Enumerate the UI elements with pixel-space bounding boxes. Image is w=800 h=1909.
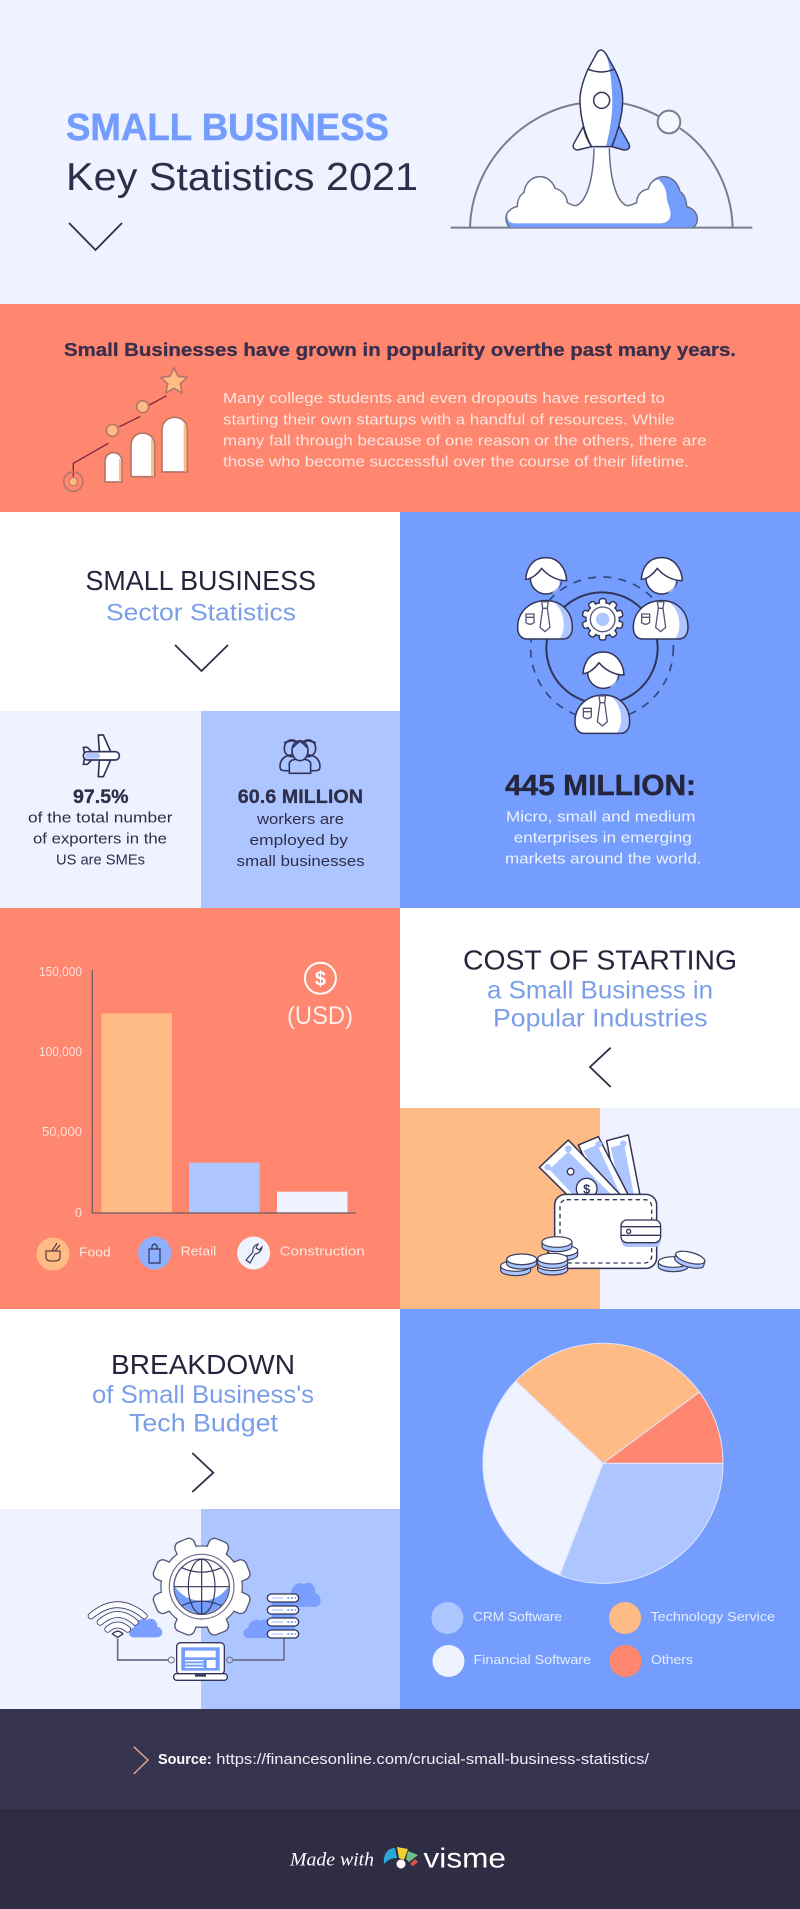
text block: workers description: small businesses bbox=[237, 854, 365, 870]
text block: enterprises description: markets around the world. bbox=[505, 852, 702, 868]
text block: intro paragraph: starting their own startups with a handful of resources. While bbox=[223, 412, 674, 428]
icon: rocket launch bbox=[451, 50, 752, 228]
text block: workers description: employed by bbox=[250, 833, 349, 849]
panel: tech budget pie bbox=[400, 1309, 800, 1709]
subheading: tech budget bbox=[92, 1381, 314, 1438]
text block: exporters description: US are SMEs bbox=[56, 853, 145, 869]
panel: emerging markets bbox=[400, 512, 800, 908]
subheading: tech budget: of Small Business's bbox=[92, 1381, 314, 1409]
text block: exporters description bbox=[28, 811, 173, 869]
panel: sector statistics heading bbox=[0, 512, 400, 711]
label: usd: (USD) bbox=[287, 1002, 353, 1030]
text: source citation: https://financesonline.com/crucial-small-business-statistics/ bbox=[216, 1752, 650, 1768]
legend: tech budget: CRM Software bbox=[473, 1609, 562, 1624]
text block: intro paragraph: Many college students and even dropouts have resorted to bbox=[223, 391, 665, 407]
panel: wallet illustration bbox=[400, 1108, 800, 1309]
arrow: chevron right bbox=[192, 1453, 213, 1492]
icon: wallet with cash and coins bbox=[501, 1135, 706, 1276]
legend: industries: Retail bbox=[181, 1244, 216, 1259]
panel: footer branding bbox=[0, 1809, 800, 1909]
heading: small business: SMALL BUSINESS bbox=[86, 565, 316, 596]
text: made with: Made with bbox=[289, 1850, 374, 1871]
subtitle: key statistics 2021: Key Statistics 2021 bbox=[66, 156, 418, 199]
arrow: source chevron bbox=[134, 1747, 148, 1774]
subheading: small business in popular industries: Popular Industries bbox=[493, 1005, 708, 1033]
icon: growth bars and star bbox=[64, 368, 187, 491]
heading: cost of starting: COST OF STARTING bbox=[463, 944, 737, 975]
arrow: chevron left bbox=[590, 1048, 611, 1087]
bar chart: cost by industry: 50,000 bbox=[42, 1125, 82, 1139]
icon: airplane bbox=[83, 735, 119, 777]
text block: exporters description: of the total number bbox=[28, 811, 173, 827]
text block: enterprises description bbox=[505, 810, 702, 868]
text block: enterprises description: enterprises in emerging bbox=[514, 831, 692, 847]
legend: industries: Food bbox=[79, 1245, 111, 1260]
heading: intro: Small Businesses have grown in popularity overthe past many years. bbox=[64, 340, 736, 360]
bar chart: cost by industry: 100,000 bbox=[39, 1045, 82, 1059]
title: small business: SMALL BUSINESS bbox=[66, 107, 389, 149]
stat: 60.6 million: 60.6 MILLION bbox=[238, 786, 363, 808]
panel: source bbox=[0, 1709, 800, 1809]
text block: workers description bbox=[237, 812, 365, 870]
text block: enterprises description: Micro, small and medium bbox=[506, 810, 695, 826]
subheading: small business in popular industries: a Small Business in bbox=[487, 977, 713, 1005]
icon: group of workers bbox=[280, 740, 320, 773]
panel: introduction bbox=[0, 304, 800, 512]
subheading: small business in popular industries bbox=[487, 977, 713, 1033]
bar chart: cost by industry bbox=[39, 965, 356, 1220]
text block: exporters description: of exporters in the bbox=[33, 832, 167, 848]
legend: tech budget: Others bbox=[651, 1652, 694, 1667]
text block: intro paragraph: many fall through because of one reason or the others, there are bbox=[223, 434, 706, 450]
bar chart: cost by industry: 0 bbox=[75, 1206, 82, 1220]
heading: breakdown: BREAKDOWN bbox=[111, 1349, 295, 1380]
panel: cost heading bbox=[400, 908, 800, 1108]
icon: dollar coin: $ bbox=[315, 968, 326, 990]
legend: industries: Construction bbox=[280, 1244, 365, 1259]
arrow: header chevron down bbox=[69, 223, 122, 250]
legend: tech budget: Financial Software bbox=[474, 1652, 591, 1667]
bar chart: cost by industry: 150,000 bbox=[39, 965, 82, 979]
icon: visme logo bbox=[384, 1847, 418, 1868]
icon: team around a gear bbox=[518, 558, 688, 733]
panel: workers stat bbox=[201, 711, 400, 908]
panel: exporters stat bbox=[0, 711, 201, 908]
legend: tech budget: Technology Service bbox=[650, 1609, 775, 1624]
panel: tech budget heading bbox=[0, 1309, 400, 1509]
subheading: sector statistics: Sector Statistics bbox=[106, 600, 296, 626]
text block: intro paragraph bbox=[223, 391, 706, 470]
legend: tech budget bbox=[431, 1602, 775, 1677]
arrow: sector chevron down bbox=[175, 645, 228, 671]
stat: 97.5%: 97.5% bbox=[73, 786, 128, 808]
text: visme wordmark: visme bbox=[424, 1843, 506, 1874]
pie chart: tech budget bbox=[483, 1343, 723, 1583]
panel: header bbox=[0, 0, 800, 304]
text block: intro paragraph: those who become successful over the course of their lifetime. bbox=[223, 454, 689, 470]
panel: startup cost chart bbox=[0, 908, 400, 1309]
text: source citation: Source: bbox=[158, 1752, 212, 1768]
subheading: tech budget: Tech Budget bbox=[129, 1410, 278, 1438]
stat: 445 million: 445 MILLION: bbox=[505, 770, 696, 802]
icon: dollar coin bbox=[305, 963, 336, 994]
legend: industries bbox=[36, 1236, 365, 1270]
icon: wallet with cash and coins: $ bbox=[583, 1182, 590, 1196]
text block: workers description: workers are bbox=[256, 812, 344, 828]
icon: global network with gear, wifi, server and laptop bbox=[91, 1537, 321, 1680]
panel: tech illustration bbox=[0, 1509, 400, 1709]
